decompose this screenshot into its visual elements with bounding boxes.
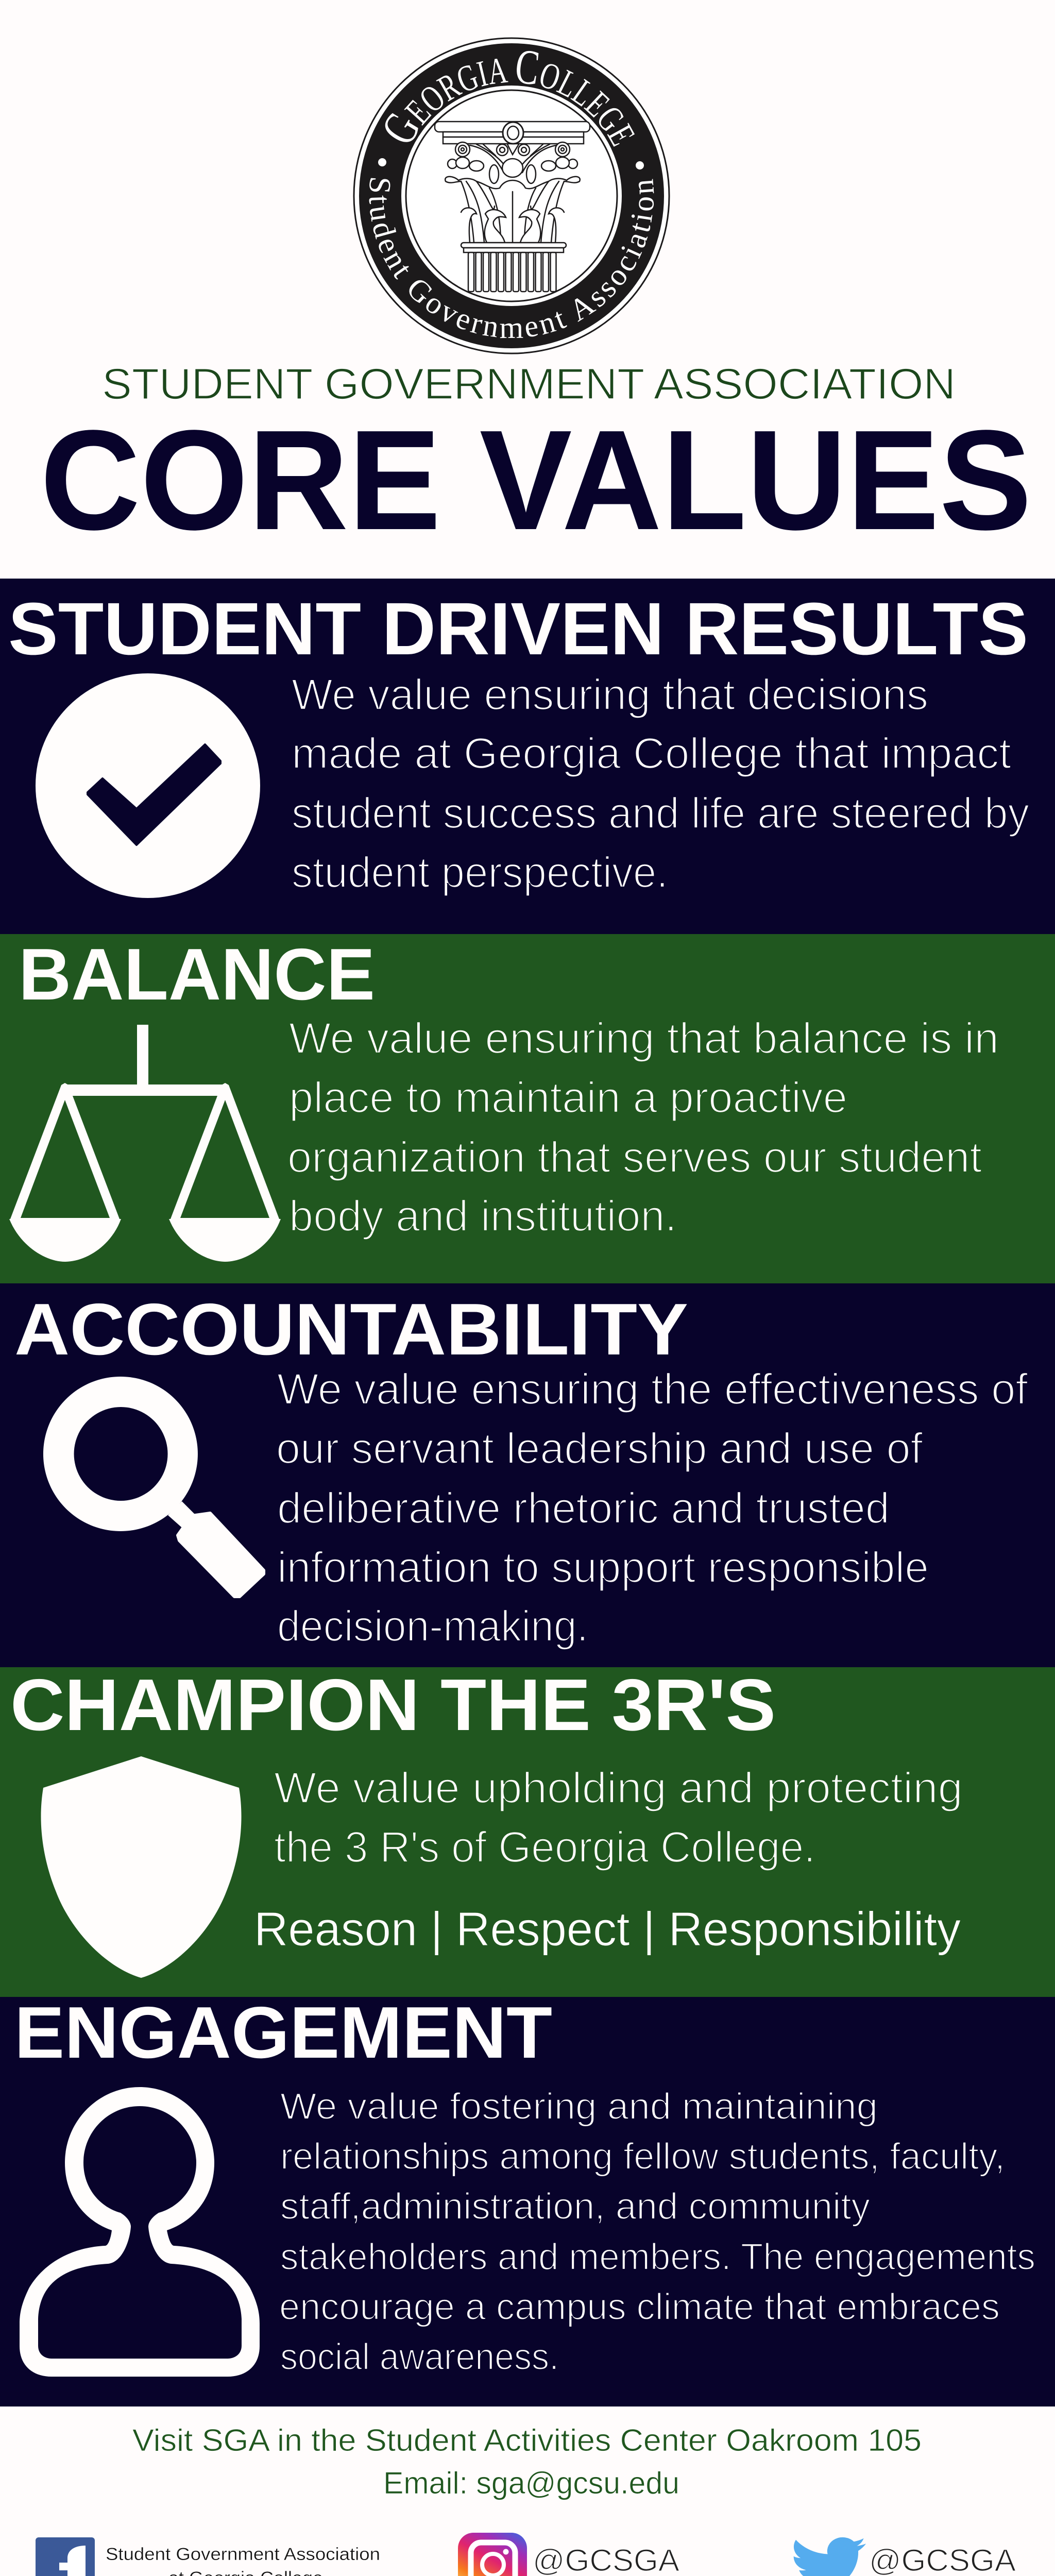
body text: body and institution.	[289, 1192, 677, 1240]
heading: balance: BALANCE	[19, 934, 375, 1015]
body text	[274, 1764, 963, 1871]
facebook page name	[106, 2545, 380, 2576]
body text: made at Georgia College that impact	[292, 729, 1011, 777]
heading: student driven results: STUDENT DRIVEN RESULTS	[8, 587, 1028, 670]
heading: accountability: ACCOUNTABILITY	[14, 1289, 688, 1370]
body text: We value ensuring the effectiveness of	[277, 1365, 1028, 1413]
body text: student perspective.	[292, 848, 668, 896]
seal text: Student Government Association: Student Government Association	[369, 178, 654, 338]
facebook page name: Student Government Association	[106, 2545, 380, 2564]
body text	[276, 1365, 1028, 1650]
seal text: Georgia College: GEORGIA COLLEGE	[385, 50, 635, 147]
icon: balance scale	[9, 1025, 281, 1262]
body text	[279, 2086, 1035, 2378]
icon: instagram	[458, 2533, 527, 2576]
body text	[292, 670, 1029, 896]
heading: champion the 3Rs: CHAMPION THE 3R'S	[10, 1664, 776, 1746]
seal dots	[378, 158, 644, 170]
body text: information to support responsible	[277, 1543, 929, 1591]
logo: Georgia College Student Government Association seal	[353, 37, 670, 354]
body text: the 3 R's of Georgia College.	[274, 1823, 815, 1871]
body text: student success and life are steered by	[292, 789, 1029, 837]
body text: We value ensuring that balance is in	[289, 1014, 999, 1062]
body text	[287, 1014, 999, 1240]
icon: check mark in circle	[36, 673, 260, 898]
body text: social awareness.	[280, 2336, 559, 2378]
panel: engagement	[0, 1992, 1055, 2406]
body text: We value upholding and protecting	[274, 1764, 963, 1812]
body text: place to maintain a proactive	[289, 1073, 847, 1122]
body text: encourage a campus climate that embraces	[279, 2286, 1000, 2328]
icon: shield	[41, 1756, 242, 1978]
body text: We value ensuring that decisions	[292, 670, 928, 719]
icon: twitter	[791, 2537, 866, 2576]
body text: stakeholders and members. The engagements	[280, 2236, 1035, 2278]
panel: balance	[0, 934, 1055, 1283]
body text: decision-making.	[277, 1602, 588, 1650]
body text: organization that serves our student	[287, 1133, 982, 1181]
contact: visit line: Visit SGA in the Student Activities Center Oakroom 105	[132, 2423, 922, 2458]
body text: staff,administration, and community	[280, 2186, 870, 2227]
icon: facebook	[36, 2537, 95, 2576]
heading: engagement: ENGAGEMENT	[14, 1992, 552, 2074]
panel: student driven results	[0, 579, 1055, 934]
body text: relationships among fellow students, faculty,	[280, 2136, 1005, 2177]
contact: email line: Email: sga@gcsu.edu	[383, 2466, 679, 2500]
body text: our servant leadership and use of	[276, 1424, 923, 1472]
panel: accountability	[0, 1283, 1055, 1667]
title: CORE VALUES	[40, 401, 1032, 560]
icon: magnifying glass	[43, 1377, 264, 1597]
column capital	[435, 122, 590, 292]
subtitle: STUDENT GOVERNMENT ASSOCIATION	[102, 360, 956, 408]
icon: person outline	[20, 2087, 260, 2377]
body text: We value fostering and maintaining	[280, 2086, 878, 2127]
body text: deliberative rhetoric and trusted	[277, 1484, 890, 1532]
panel: champion the 3Rs	[0, 1664, 1055, 1997]
three Rs line: Reason | Respect | Responsibility	[254, 1902, 961, 1956]
